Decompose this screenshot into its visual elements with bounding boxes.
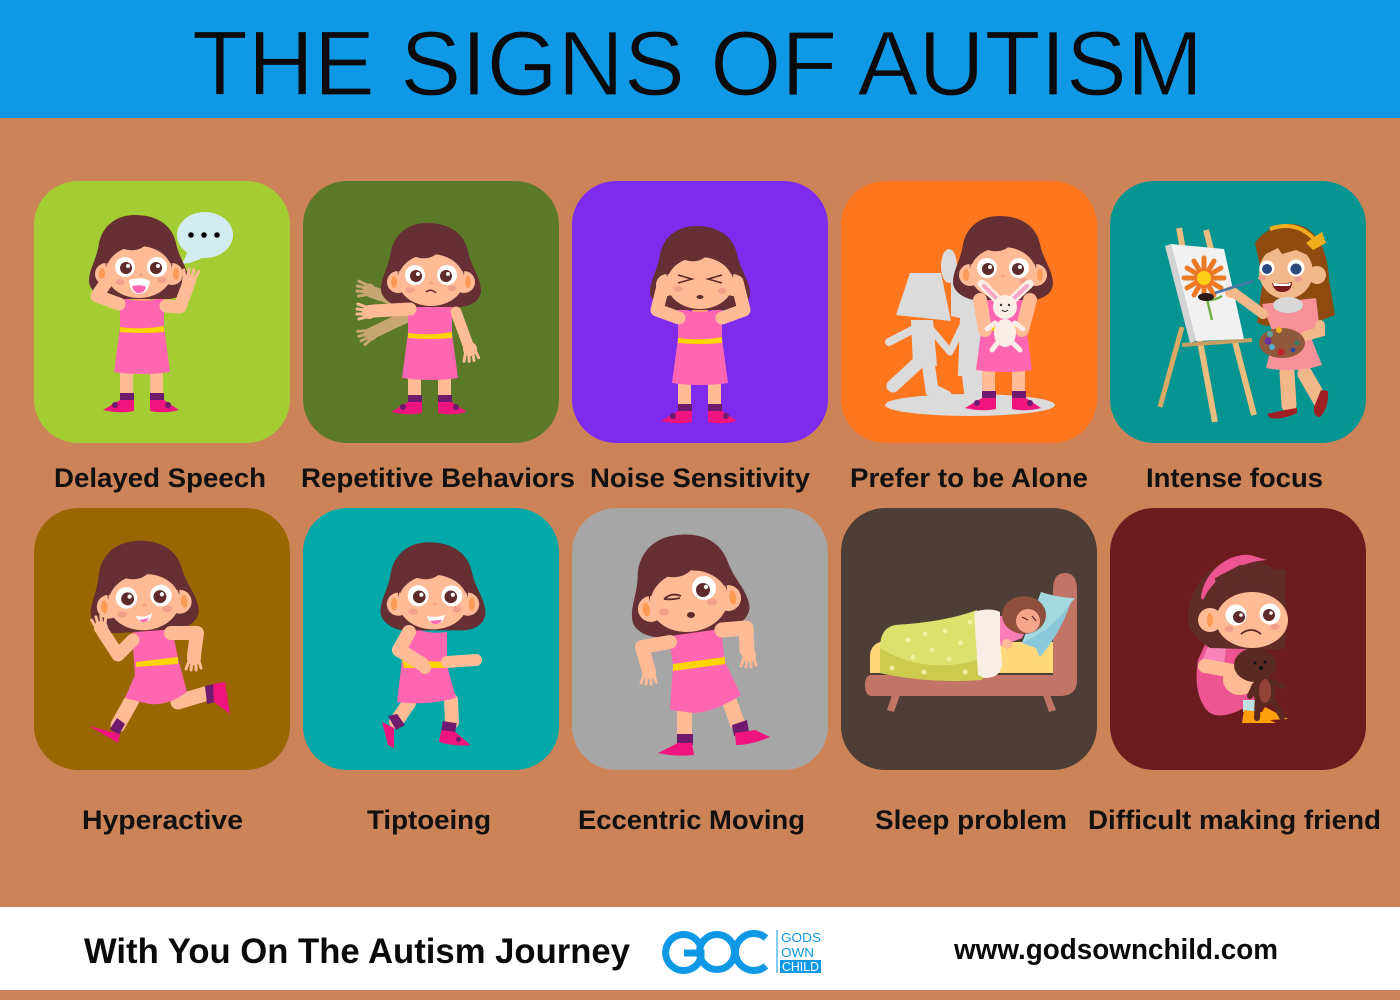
panel: eccentric moving: [572, 508, 828, 770]
panel: delayed speech: [34, 181, 290, 443]
rabbit toy: [982, 284, 1029, 350]
painter girl: [1215, 224, 1335, 418]
sad girl with teddy: [1188, 555, 1288, 723]
shadow children: [885, 249, 1055, 416]
blanket and sleeping girl: [880, 596, 1046, 681]
panel: repetitive behaviors: [303, 181, 559, 443]
panel: hyperactive: [34, 508, 290, 770]
girl on tiptoes: [380, 542, 486, 748]
bed: [865, 573, 1077, 712]
teddy bear: [1234, 648, 1282, 718]
ghost arms: [356, 281, 410, 345]
girl running: [86, 537, 230, 743]
label: noise sensitivity: Noise Sensitivity: [590, 463, 810, 493]
speech bubble: [177, 212, 233, 264]
label: eccentric moving: Eccentric Moving: [578, 805, 805, 835]
label: prefer to be alone: Prefer to be Alone: [850, 463, 1088, 493]
panel: intense focus: [1110, 181, 1366, 443]
logo: GODS: [781, 930, 821, 945]
pillow: [1022, 592, 1075, 657]
logo: OWN: [781, 945, 814, 960]
label: tiptoeing: Tiptoeing: [367, 805, 491, 835]
easel: [1160, 228, 1254, 422]
girl covering ears: [650, 226, 750, 423]
girl with rabbit: [953, 216, 1053, 410]
girl waving arm: [357, 223, 481, 414]
logo: [666, 930, 821, 974]
label: sleep problem: Sleep problem: [875, 805, 1067, 835]
flower painting: [1184, 258, 1224, 320]
panel: difficult making friend: [1110, 508, 1366, 770]
girl moving oddly: [621, 526, 770, 756]
panel: tiptoeing: [303, 508, 559, 770]
label: intense focus: Intense focus: [1146, 463, 1323, 493]
panel: sleep problem: [841, 508, 1097, 770]
palette: [1259, 327, 1305, 358]
footer band: [0, 907, 1400, 990]
label: delayed speech: Delayed Speech: [54, 463, 266, 493]
label: repetitive behaviors: Repetitive Behaviors: [301, 463, 575, 493]
label: difficult making friend: Difficult making friend: [1088, 805, 1381, 835]
girl talking: [89, 215, 199, 412]
tagline: With You On The Autism Journey: [84, 932, 631, 971]
logo: CHILD: [782, 960, 819, 974]
panel: prefer to be alone: [841, 181, 1097, 443]
label: hyperactive: Hyperactive: [82, 805, 243, 835]
website: www.godsownchild.com: [953, 934, 1278, 966]
title: THE SIGNS OF AUTISM: [192, 13, 1203, 115]
panel: noise sensitivity: [572, 181, 828, 443]
title banner: [0, 0, 1400, 118]
